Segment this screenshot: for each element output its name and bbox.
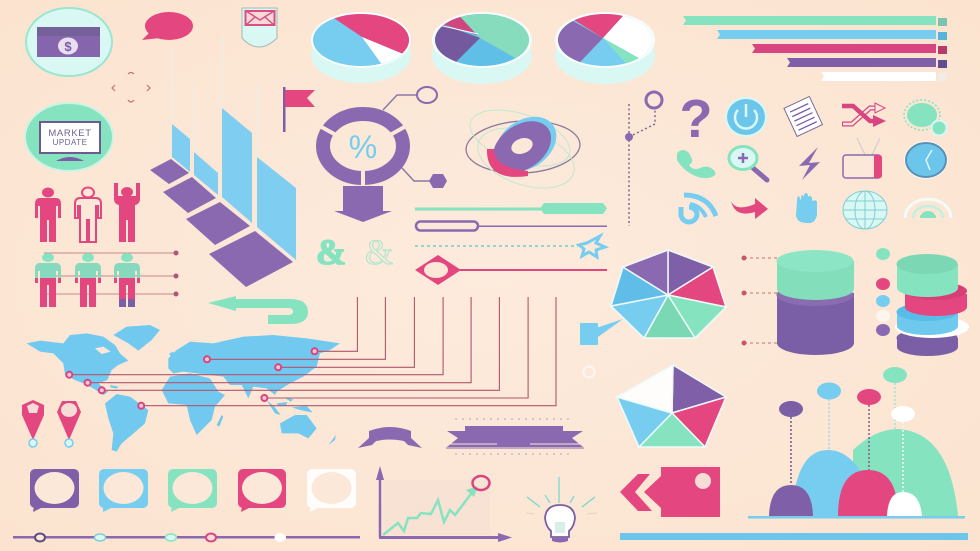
icon: curved pink arrow xyxy=(731,198,768,219)
icon: clock xyxy=(904,141,948,179)
price tag with chevron xyxy=(620,467,720,517)
money badge: $ xyxy=(64,39,72,54)
pentagon pie xyxy=(617,365,726,447)
world map with location lines xyxy=(27,297,556,452)
stacked disc cylinder with bullets xyxy=(876,248,969,356)
icon: lightning bolt xyxy=(799,147,820,180)
three pink person icons xyxy=(35,183,140,242)
market update badge: MARKET xyxy=(48,128,92,139)
pink speech bubble xyxy=(142,12,193,40)
three split-colour person icons with leader lines xyxy=(35,250,178,307)
hill chart with balloons xyxy=(748,367,965,518)
continents: Americas and Greenland xyxy=(27,325,160,452)
timeline slider xyxy=(13,533,360,542)
money badge xyxy=(26,8,112,76)
arched purple ribbon xyxy=(358,427,422,448)
icon: document xyxy=(784,96,822,136)
pie chart 1 xyxy=(311,12,411,83)
icon: question mark: ? xyxy=(680,89,712,149)
icon grid xyxy=(677,89,951,229)
four small direction chevrons xyxy=(112,72,150,102)
green U-turn arrow xyxy=(208,296,308,324)
icon: telephone xyxy=(677,150,716,178)
disc with orbits xyxy=(463,99,582,199)
heptagon connector tab xyxy=(580,319,623,345)
growth line chart xyxy=(376,466,512,542)
pink flag xyxy=(283,87,315,132)
big two-tier cylinder xyxy=(742,250,854,355)
percent donut with arrow: % xyxy=(349,129,377,165)
ampersand glyphs: & xyxy=(316,232,346,272)
icon: power button xyxy=(725,97,767,137)
heptagon pie xyxy=(611,250,726,338)
icon: television xyxy=(843,138,882,178)
two pink map pins xyxy=(22,400,81,447)
icon: magnifier xyxy=(729,146,767,180)
dotted connector xyxy=(625,92,662,226)
market update badge: UPDATE xyxy=(53,138,87,147)
icon: shuffle arrows xyxy=(842,103,886,127)
four slider line elements xyxy=(415,203,607,285)
location lines and markers xyxy=(66,297,556,409)
small white ring xyxy=(584,366,594,378)
isometric bar chart xyxy=(150,35,296,287)
icon: hand xyxy=(796,193,817,223)
five speech-bubble squares xyxy=(30,469,356,512)
icon: green splash circles xyxy=(904,100,948,136)
percent donut with arrow xyxy=(318,87,447,222)
flat purple banner xyxy=(446,419,584,454)
icon: globe xyxy=(843,191,887,229)
icon: rainbow xyxy=(905,199,951,218)
market update badge xyxy=(25,103,113,171)
envelope shield xyxy=(242,8,277,47)
pie chart 2 xyxy=(432,12,532,84)
continents: Eurasia, Africa, Australia xyxy=(162,335,340,445)
horizontal ribbon bars xyxy=(683,16,947,81)
bottom blue bar xyxy=(620,533,968,540)
icon: rss feed xyxy=(681,195,716,222)
light bulb with rays xyxy=(526,477,597,542)
ampersand glyphs: & xyxy=(365,232,393,272)
pie chart 3 xyxy=(555,12,655,84)
ampersand glyphs xyxy=(316,232,393,272)
